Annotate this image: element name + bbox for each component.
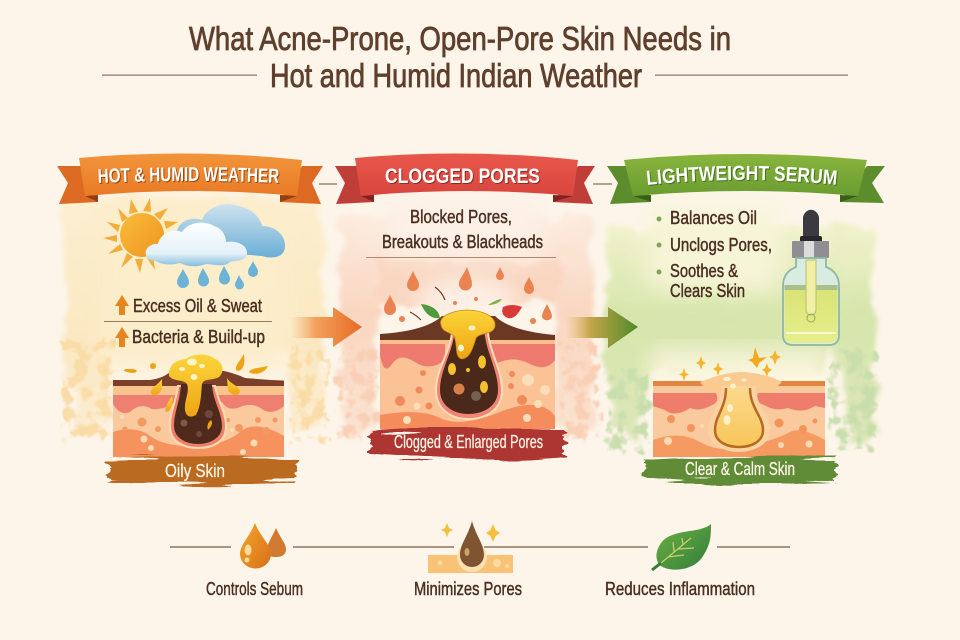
skin diagram: clear skin (653, 372, 825, 457)
benefits list: Balances Oil (670, 208, 757, 228)
panel 3 watercolor wash (604, 205, 880, 452)
benefit: reduces inflammation (605, 524, 755, 599)
benefit: minimizes pores: Minimizes Pores (414, 579, 522, 599)
brush label: oily skin (108, 457, 296, 485)
benefit: controls sebum: Controls Sebum (206, 579, 303, 599)
banner: lightweight serum: LIGHTWEIGHT SERUM (646, 166, 838, 186)
brush label: oily skin: Oily Skin (165, 461, 225, 481)
banner: clogged pores (335, 153, 595, 204)
benefit: reduces inflammation: Reduces Inflammation (605, 579, 755, 599)
panel: lightweight serum (598, 154, 885, 486)
skin diagram: clogged pore (380, 310, 555, 429)
benefits strip (170, 521, 790, 599)
title: Hot and Humid Indian Weather (270, 57, 642, 94)
icon: serum dropper bottle (783, 210, 839, 345)
arrow: weather to clogged pores (290, 307, 362, 347)
benefit: controls sebum (206, 523, 303, 599)
brush label: clear and calm skin: Clear & Calm Skin (685, 459, 795, 479)
icon: sun and rain clouds (103, 198, 285, 289)
up arrow: bacteria (115, 327, 129, 347)
benefits list: Unclogs Pores, (670, 235, 772, 255)
banner: hot and humid weather (57, 154, 323, 204)
title (102, 20, 848, 94)
banner: lightweight serum (607, 154, 885, 204)
benefits list: Soothes & (670, 261, 738, 281)
sparkles (679, 347, 781, 381)
text: blocked pores: Blocked Pores, (410, 207, 512, 227)
text: blocked pores (366, 207, 556, 258)
panel 2 watercolor wash (338, 200, 598, 440)
arrow: clogged pores to serum (565, 307, 638, 348)
brush label: clogged and enlarged pores: Clogged & Enlarged Pores (394, 432, 543, 452)
falling droplets and debris (384, 267, 552, 324)
benefits list: Clears Skin (670, 281, 745, 301)
panel 1 watercolor wash (62, 198, 326, 442)
banner: hot and humid weather: HOT & HUMID WEATHER (98, 167, 280, 184)
benefits list (656, 208, 772, 301)
benefit: minimizes pores (414, 521, 522, 599)
connector dashes between banners (319, 183, 612, 185)
text: blocked pores: Breakouts & Blackheads (382, 232, 543, 252)
brush label: clogged and enlarged pores (372, 429, 564, 460)
text: bacteria and build-up: Bacteria & Build-up (132, 327, 265, 347)
panel: hot and humid weather (57, 154, 332, 488)
title: What Acne-Prone, Open-Pore Skin Needs in (189, 20, 731, 57)
skin diagram: oily skin (113, 354, 284, 457)
banner: clogged pores: CLOGGED PORES (385, 165, 540, 188)
text: excess oil and sweat: Excess Oil & Sweat (133, 296, 262, 316)
brush label: clear and calm skin (644, 457, 836, 484)
panel: clogged pores (335, 153, 598, 460)
up arrow: excess oil (115, 295, 129, 315)
